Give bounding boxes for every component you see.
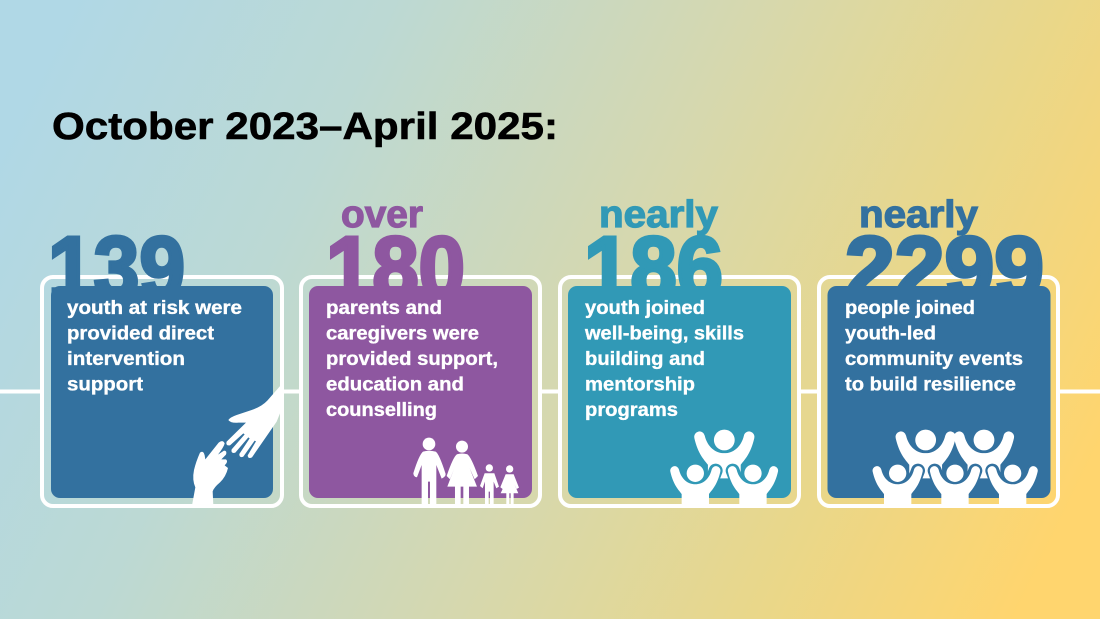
description text: education and xyxy=(326,375,464,396)
panel: parents and caregivers xyxy=(301,194,540,506)
description text: well-being, skills xyxy=(584,324,744,345)
description text: intervention xyxy=(67,349,185,370)
title: October 2023–April 2025: xyxy=(52,106,558,148)
card frame xyxy=(301,277,540,506)
number 180: 180 xyxy=(326,218,465,317)
description text xyxy=(326,298,498,421)
description text: people joined xyxy=(845,298,975,319)
description text: mentorship xyxy=(585,375,695,396)
description text: to build resilience xyxy=(845,375,1016,396)
icon: group of five xyxy=(873,430,1038,505)
card body xyxy=(568,286,791,498)
panel: community events xyxy=(819,194,1058,506)
description text: counselling xyxy=(326,400,437,421)
number 139: 139 xyxy=(48,218,185,317)
description text: youth-led xyxy=(845,324,936,345)
panel: youth programs xyxy=(560,194,799,506)
card frame xyxy=(560,277,799,506)
qualifier nearly: nearly xyxy=(599,194,718,236)
card body xyxy=(309,286,532,498)
icon: reaching hands xyxy=(192,385,281,505)
description text xyxy=(845,298,1023,396)
icon: group of three xyxy=(670,430,778,505)
description text: parents and xyxy=(326,298,442,319)
card body xyxy=(828,286,1050,498)
description text: caregivers were xyxy=(326,324,479,345)
description text: provided support, xyxy=(326,349,498,370)
description text: building and xyxy=(585,349,705,370)
description text: programs xyxy=(585,400,678,421)
description text: community events xyxy=(845,349,1023,370)
number 186: 186 xyxy=(584,218,723,317)
card frame xyxy=(819,277,1058,506)
description text: youth at risk were xyxy=(67,298,242,319)
description text: support xyxy=(67,375,144,396)
description text xyxy=(584,298,744,421)
qualifier over: over xyxy=(341,194,423,236)
icon: family xyxy=(413,438,519,504)
number 2299: 2299 xyxy=(845,218,1044,317)
card body xyxy=(51,286,273,498)
qualifier nearly: nearly xyxy=(859,194,978,236)
card frame xyxy=(42,277,282,506)
panel: youth at risk xyxy=(42,218,282,506)
description text xyxy=(67,298,242,396)
description text: provided direct xyxy=(67,324,215,345)
description text: youth joined xyxy=(585,298,705,319)
